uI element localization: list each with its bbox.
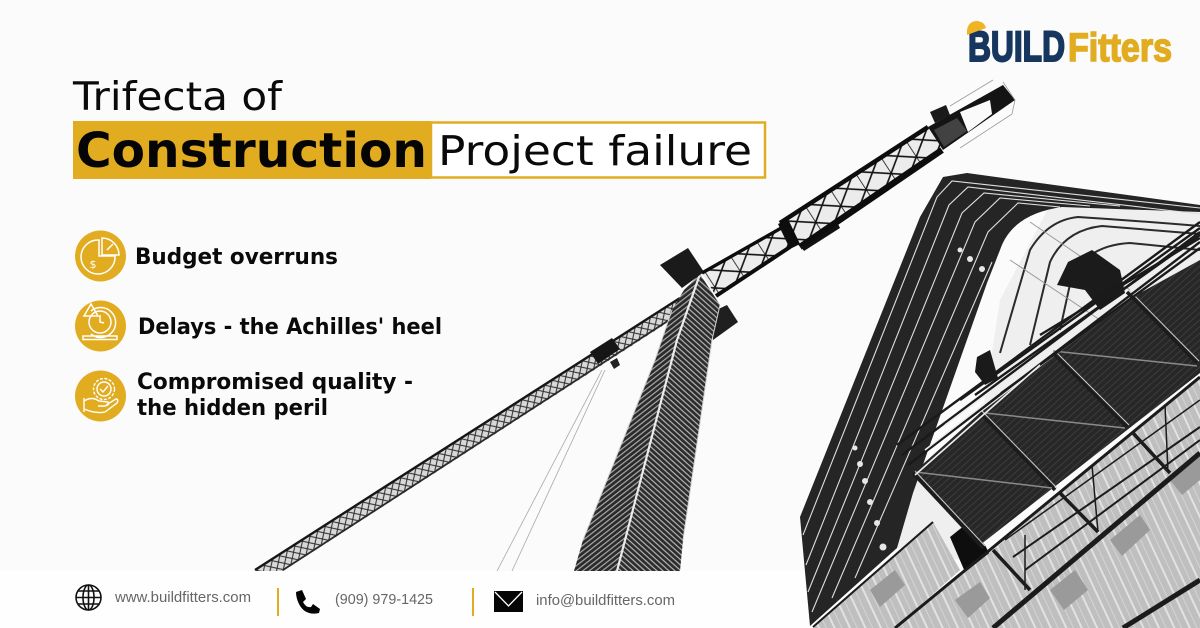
label: Budget overruns [135,245,338,270]
label: Delays - the Achilles' heel [138,315,442,340]
crane: tower mast [574,274,720,571]
crane: operator cab [660,248,704,288]
title line 1: Trifecta of [72,75,283,120]
icon: hard hat [967,21,986,35]
label: Compromised quality - [137,370,413,395]
label: the hidden peril [137,396,328,421]
icon: globe [76,585,101,610]
building: black recess [950,525,990,572]
icon: budget pie chart [75,230,126,282]
photo: tower crane [255,80,1015,571]
label [137,370,413,421]
logo wordmark: BUILD: BUILD [968,23,1065,71]
icon: delay clock [75,300,126,352]
icon: phone [296,590,320,614]
crane: main jib [702,127,942,296]
divider [472,588,474,616]
item: compromised quality [75,370,413,422]
item: delays [75,300,442,352]
contact: website [76,585,251,610]
title highlight: Construction: Construction [76,123,427,179]
crane: jib head [928,80,1015,150]
website text: www.buildfitters.com [114,590,251,606]
building: light curved facade [897,205,1200,560]
footer band [0,571,1200,628]
logo wordmark: Fitters: Fitters [1068,26,1172,70]
logo [967,21,1172,71]
phone text: (909) 979-1425 [335,592,433,608]
crane: stay wires [497,370,605,571]
item: budget overruns [75,230,338,282]
building: dark underside canopy [913,260,1200,545]
icon: budget pie chart: $ [90,258,96,271]
building: dark outer shell [800,173,1200,626]
contact: phone [296,590,433,614]
contact: email [494,591,675,612]
icon: envelope [494,591,523,612]
building: glass facade [813,377,1200,628]
icon: quality badge on hand [75,370,126,422]
email text: info@buildfitters.com [536,593,675,609]
crane: lower counterweight block [712,305,738,340]
photo: building [800,173,1200,628]
crane: counter jib lattice [255,298,684,571]
building: steel cables and struts [897,222,1200,590]
divider [277,588,279,616]
title box: Project failure: Project failure [438,127,752,175]
